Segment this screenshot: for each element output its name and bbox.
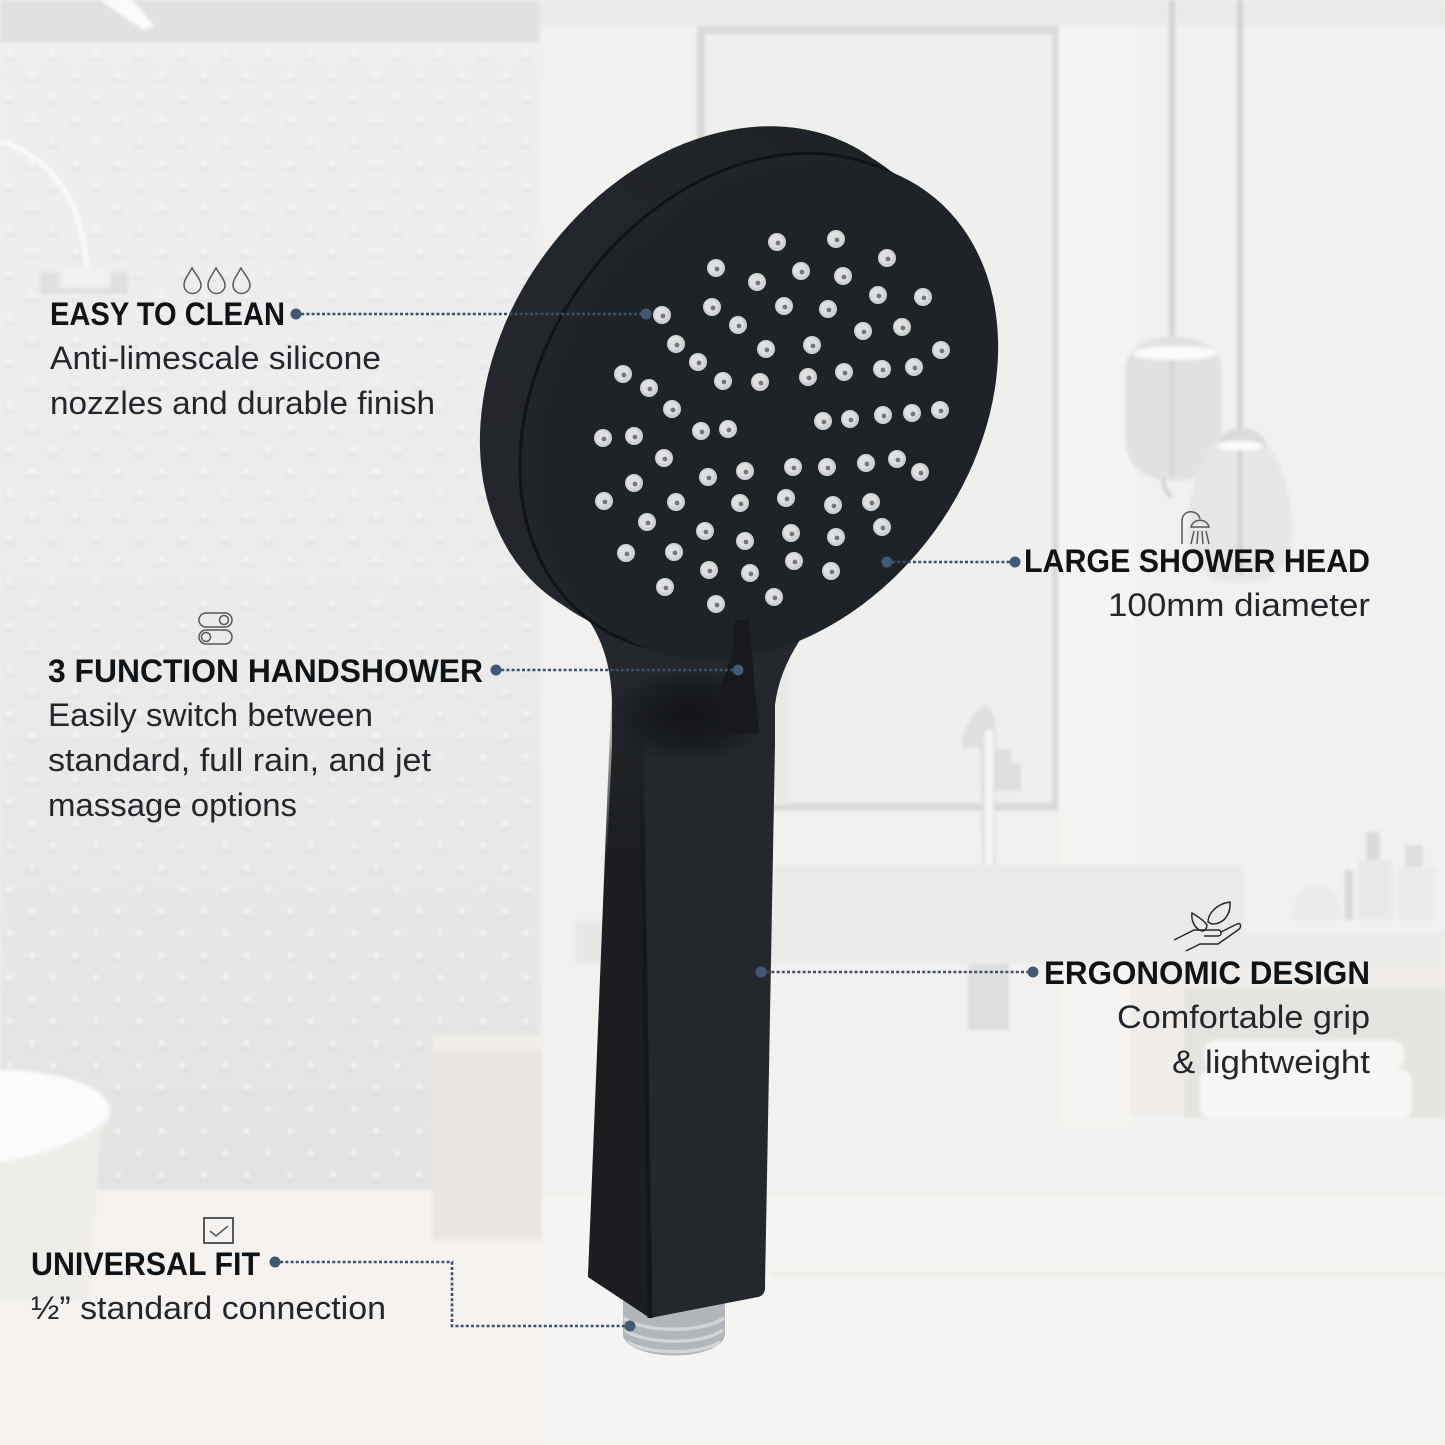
icon: checkbox (204, 1218, 233, 1243)
neck shadow (610, 665, 770, 765)
callout: 3 function handshower (48, 613, 483, 823)
description line 2: nozzles and durable finish (50, 385, 435, 421)
callout: easy to clean (50, 268, 435, 421)
callout: ergonomic design (1044, 902, 1370, 1080)
connector: universal fit (270, 1256, 636, 1332)
head face (443, 70, 1093, 750)
connector: 3 function (490, 664, 744, 676)
description: Anti-limescale silicone (50, 340, 381, 376)
description: Comfortable grip (1117, 999, 1370, 1035)
description line 2: standard, full rain, and jet (48, 742, 431, 778)
heading: ERGONOMIC DESIGN (1044, 955, 1370, 991)
heading: LARGE SHOWER HEAD (1024, 543, 1370, 579)
handle left facet (588, 680, 650, 1318)
description: ½” standard connection (31, 1290, 386, 1326)
icon: toggles (199, 613, 232, 644)
connector: large shower head (882, 556, 1020, 568)
description: Easily switch between (48, 697, 373, 733)
icon: water drops (184, 268, 250, 294)
connector: ergonomic (756, 966, 1038, 978)
description line 3: massage options (48, 787, 297, 823)
callout: universal fit (31, 1218, 386, 1326)
description line 2: & lightweight (1172, 1044, 1370, 1080)
icon: shower (1182, 512, 1209, 544)
shower head back (384, 36, 1083, 746)
function lever (720, 620, 759, 735)
nozzles (594, 230, 950, 613)
product: black handshower (384, 36, 1093, 1356)
description: 100mm diameter (1108, 587, 1370, 623)
thread connector (623, 1300, 725, 1356)
handle (585, 560, 800, 1318)
heading: UNIVERSAL FIT (31, 1246, 260, 1282)
handle seam (641, 720, 650, 1318)
connector: easy to clean (290, 308, 652, 320)
heading: EASY TO CLEAN (50, 296, 285, 332)
icon: hand with plant (1174, 902, 1241, 951)
callout: large shower head (1024, 512, 1370, 623)
head ridge (425, 63, 1075, 743)
heading: 3 FUNCTION HANDSHOWER (48, 653, 483, 689)
